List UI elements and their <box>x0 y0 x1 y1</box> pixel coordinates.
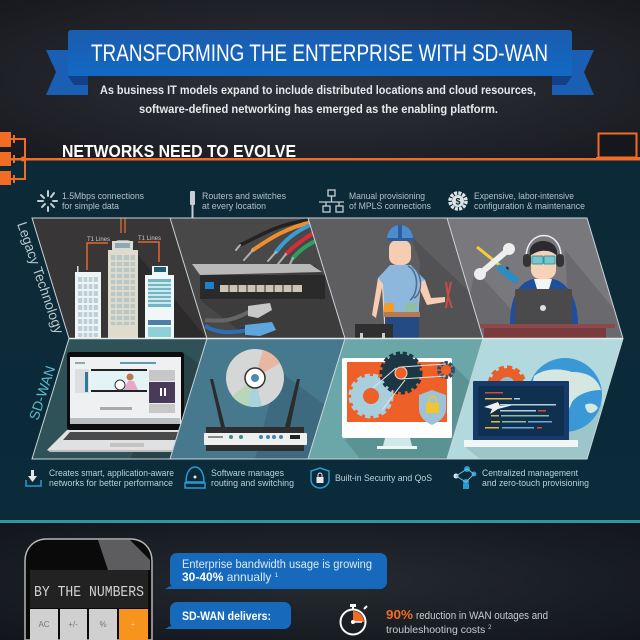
router box <box>192 264 325 299</box>
panel outlines <box>32 218 623 459</box>
background: networks band <box>0 159 640 521</box>
code laptop <box>464 381 578 447</box>
desk <box>480 324 615 339</box>
gears <box>351 354 453 416</box>
building right <box>145 266 174 339</box>
panel: legacy worker <box>306 218 486 339</box>
caption: expensive: Expensive, labor-intensive <box>474 191 574 202</box>
caption: centralized: Centralized management <box>482 468 578 479</box>
shield padlock <box>419 390 446 425</box>
stat: 90% reduction: 90% <box>386 607 413 622</box>
icon: dollar gear: $ <box>455 196 461 206</box>
monitor <box>342 358 452 449</box>
calculator keys: +/- <box>68 620 78 629</box>
icon: dollar gear <box>450 193 466 209</box>
calculator keys: ÷ <box>131 620 136 629</box>
T1 lines: T1 Lines <box>138 236 161 242</box>
caption: provisioning: of MPLS connections <box>349 201 431 212</box>
icon: spinner <box>38 191 57 211</box>
gear <box>488 366 526 381</box>
stat: 90% reduction: troubleshooting costs <box>386 624 485 636</box>
calculator keys <box>30 609 148 640</box>
panel: SD-WAN software router <box>168 339 348 460</box>
panel: legacy routers <box>168 218 348 339</box>
speech bubble: bandwidth: Enterprise bandwidth usage is growing <box>182 559 372 571</box>
icon: download <box>26 470 41 486</box>
teal section divider <box>0 520 640 523</box>
panel: SD-WAN central management <box>445 339 625 460</box>
caption: provisioning: Manual provisioning <box>349 191 425 202</box>
background: numbers section <box>0 521 640 640</box>
caption: creates smart: networks for better performance <box>49 478 173 489</box>
caption: connections <box>62 191 144 212</box>
toolbox <box>355 324 393 339</box>
caption: connections: for simple data <box>62 201 120 212</box>
caption: security: Built-in Security and QoS <box>335 473 432 484</box>
T1 lines: T1 Lines <box>87 237 110 243</box>
icon: network topology <box>319 190 344 212</box>
pliers <box>446 282 452 308</box>
speech bubble: bandwidth <box>165 553 387 589</box>
caption: routers: at every location <box>202 201 266 212</box>
subtitle text: software-defined networking has emerged as the enabling platform. <box>139 102 498 116</box>
caption: routers: Routers and switches <box>202 191 286 202</box>
tools: wrench and screwdriver <box>474 243 515 280</box>
speech bubble: bandwidth: 30-40% annually <box>182 570 271 584</box>
caption: software manages: routing and switching <box>211 478 294 489</box>
icon: stopwatch <box>340 604 367 634</box>
icon: orange servers connector <box>0 132 26 185</box>
panel: SD-WAN laptop <box>30 339 210 460</box>
technician <box>510 236 578 325</box>
subtitle text <box>100 83 536 116</box>
caption: provisioning <box>349 191 431 212</box>
T1 lines <box>87 218 161 270</box>
speech bubble: bandwidth: 1 <box>275 573 279 579</box>
worker <box>372 225 445 339</box>
caption: connections: 1.5Mbps connections <box>62 191 144 202</box>
speech bubble: SD-WAN delivers <box>165 602 291 629</box>
background: header <box>0 0 640 160</box>
calculator keys: % <box>99 620 107 629</box>
globe <box>528 358 602 432</box>
ethernet cables <box>205 303 276 336</box>
icon: ethernet cable <box>190 191 195 218</box>
coloured wires <box>236 220 318 266</box>
heading: networks need to evolve: NETWORKS NEED TO EVOLVE <box>62 141 296 161</box>
row label: legacy technology: Legacy Technology <box>14 220 67 336</box>
building left <box>75 266 101 339</box>
laptop <box>47 352 188 452</box>
CD disc <box>226 349 284 407</box>
stat: 90% reduction: 2 <box>488 625 492 631</box>
panel: legacy buildings <box>30 218 210 339</box>
panel: SD-WAN security monitor <box>306 339 486 460</box>
calculator phone <box>25 539 152 640</box>
caption: creates smart: Creates smart, application-aware <box>49 468 174 479</box>
building middle <box>108 240 138 339</box>
caption: routers <box>202 191 286 212</box>
calculator keys: AC <box>38 620 50 629</box>
orange network line <box>0 158 640 160</box>
caption: software manages: Software manages <box>211 468 284 479</box>
calculator display: BY THE NUMBERS <box>34 584 144 601</box>
speech bubble: SD-WAN delivers: SD-WAN delivers: <box>182 611 271 623</box>
stat: 90% reduction: reduction in WAN outages and <box>416 610 548 622</box>
legacy captions row <box>38 190 585 218</box>
wireless router <box>204 379 307 451</box>
caption: expensive: configuration & maintenance <box>474 201 585 212</box>
title ribbon <box>46 30 594 95</box>
icon: router dome <box>185 467 205 488</box>
icon: shield lock <box>311 468 329 488</box>
SD-WAN captions row <box>26 466 589 489</box>
icon: people network <box>454 466 476 489</box>
row label: SD-WAN: SD-WAN <box>26 364 58 422</box>
icon: orange laptop <box>596 134 640 160</box>
stat: 90% reduction <box>386 607 548 636</box>
caption: creates smart <box>49 468 174 489</box>
caption: centralized <box>482 468 589 489</box>
caption: expensive <box>474 191 585 212</box>
caption: centralized: and zero-touch provisioning <box>482 478 589 489</box>
caption: software manages <box>211 468 294 489</box>
subtitle text: As business IT models expand to include distributed locations and cloud resources, <box>100 83 536 97</box>
panel: legacy technician <box>445 218 625 339</box>
